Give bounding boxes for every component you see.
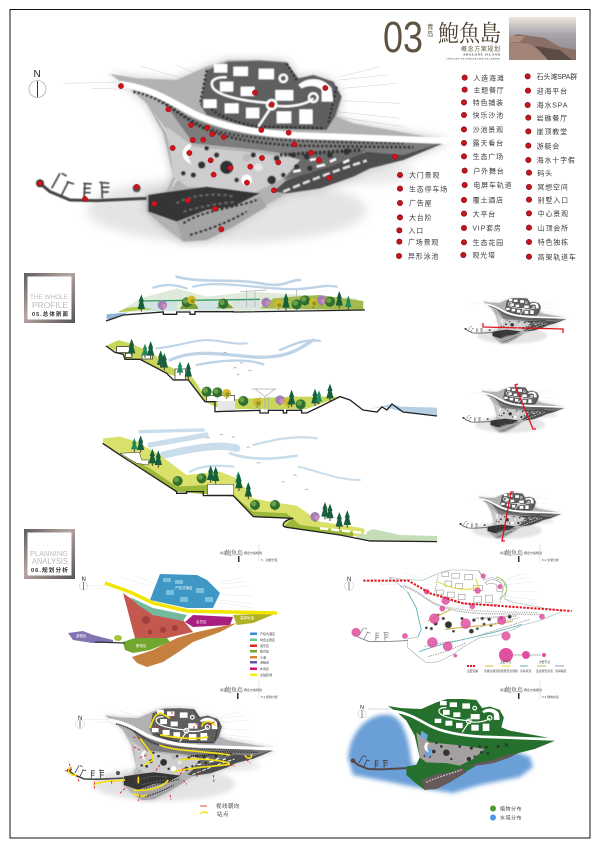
section profile 3 [103,430,437,542]
section heading card: whole profile: THE WHOLE [30,294,68,301]
birds [223,352,251,375]
mini title: zoning: 青岛 [220,550,226,555]
legend column 2: 沙池景观 [473,125,504,134]
legend column 2: 生态花园 [473,238,504,247]
vegetation [119,291,363,312]
legend column 3 [537,72,578,261]
legend column 3: 山顶会所 [538,223,569,232]
sky clouds [153,277,337,289]
north arrow: zoning: N [82,577,86,583]
node circles [352,574,545,657]
zoning map [68,574,277,667]
legend column 2: 电屏车轨道 [473,181,512,190]
mini title: circulation [500,544,559,562]
circulation legend [467,648,566,673]
zone labels: 教育区 [136,643,147,648]
section cut line 1 [483,323,563,333]
legend column 1: 异形泳池 [408,252,439,261]
english title: ABALONE ISLAND [463,52,501,56]
legend column 2: 户外舞台 [473,166,505,175]
ground section line [103,443,437,542]
zoning legend: 特色主题区 [260,637,275,642]
road [393,711,558,740]
legend column 2 [472,73,512,260]
mini title: circulation: 青岛 [500,550,506,555]
legend column 3: 岩礁餐厅 [537,113,568,122]
section cut line 2 [515,384,536,429]
key plan thumbnail 1 [464,298,568,344]
buildings [117,347,235,402]
ground section line [106,346,437,416]
node label: 站点 [217,810,229,818]
mini title: circulation: 5.2 交通分析 [542,557,559,562]
numbered red markers on map [37,83,398,232]
viewing tower [252,389,277,412]
mini title: vegetation and water: 5.4 绿地水系 [542,694,559,699]
zone: magenta [185,615,233,627]
english title [446,52,501,60]
section heading card: whole profile: PROFILE [32,300,68,310]
pier [353,761,406,769]
line labels: 主要道路 [467,669,478,673]
zoning legend [250,631,275,677]
circulation map [352,570,572,663]
section heading card: whole profile: 05.总体剖面 [32,310,68,318]
marina head [351,758,355,763]
zoning legend: 产权式酒店 [260,631,275,636]
city label: 青 [427,22,434,31]
legend column 3: 海水SPA [537,101,568,110]
birds [207,434,308,490]
pier [95,642,125,643]
villa blocks [163,578,213,602]
north arrow: view analysis [76,716,84,728]
zone: purple marina [68,631,113,643]
legend column 3: 崖顶教堂 [537,127,568,136]
south-east shoreline [463,753,518,767]
zone: olive tip [233,613,277,625]
vegetation legend [490,806,522,822]
yellow view corridors [69,713,251,796]
buildings [120,452,234,495]
north arrow: zoning [80,577,88,590]
pebble texture [426,770,461,782]
legend column 2: 特色铺装 [473,98,504,107]
north arrow: vegetation [358,705,390,718]
north arrow: vegetation: N [360,705,364,711]
zone: red central [123,593,193,638]
line labels: 滨海步道 [520,669,531,673]
legend column 2: VIP套房 [472,224,502,233]
section cut line 3 [502,492,514,541]
zone labels [76,585,254,648]
section heading card: planning analysis: 06.规划分析 [31,566,68,574]
legend column 1: 生态停车场 [409,184,448,193]
legend column 2: 大平台 [473,209,496,218]
zoning legend: 休闲区 [260,666,269,671]
arrow label: 视线朝向 [216,802,240,810]
city label [427,22,434,38]
zoning legend: 教育区 [260,648,269,654]
sky clouds [140,430,360,480]
mini title: zoning [220,544,278,562]
view analysis legend [200,802,240,818]
legend column 2: 人造海滩 [473,73,505,82]
legend column 3: 特色独栋 [538,238,569,247]
legend column 3: 石头滩SPA群 [537,72,578,81]
villa rings [439,706,492,732]
inner blue pools [421,731,433,757]
mini title: view analysis: 青岛 [220,687,226,692]
base plan [67,708,277,801]
calligraphy title: 鮑魚島 [438,15,501,48]
line labels: 滨海路径 [555,669,566,673]
photo: coastal rocks [509,17,576,60]
line labels: 次要节点 [539,660,550,664]
red zone tree marks [142,616,178,634]
legend column 1 [408,171,448,261]
hillside planting [103,437,368,537]
zone labels: 游艇区 [76,633,87,638]
pale hill [355,529,437,541]
section heading card: planning analysis: PLANNING [30,549,68,558]
zone labels: 会员区 [196,619,207,624]
key plan thumbnail 2 [462,387,566,433]
zoning legend: 游艇会 [260,660,269,664]
section heading card: planning analysis: ANALYSIS [32,557,68,566]
mini title: vegetation and water: 概念方案规划 [524,687,542,692]
yellow sample [200,812,208,814]
mini title: view analysis [220,681,278,699]
line labels: 次级交通流线 [484,669,501,673]
section profile 2 [106,339,437,416]
legend column 2: 主题餐厅 [473,85,505,94]
white highlight [424,742,429,752]
legend column 1: 入口 [408,227,424,235]
mini title: circulation: 鮑魚島 [505,548,523,557]
legend markers [396,74,532,259]
marina [359,756,388,768]
main master plan map [36,60,450,243]
hillside planting [106,340,340,409]
legend column 2: 露天看台 [473,139,504,148]
mini title: view analysis: 概念方案规划 [244,687,262,692]
red main traffic line [363,581,572,611]
zone: teal strip [130,597,187,621]
mini title: zoning: 概念方案规划 [244,550,262,555]
sky clouds [157,340,320,365]
mini title: zoning: 鮑魚島 [225,548,243,557]
line labels: 别墅区交通线 [501,669,518,673]
legend column 3: 迎海平台 [537,86,568,95]
node scale [499,648,546,662]
map legend list [396,72,578,261]
white structure [217,401,235,410]
line labels: 主要节点 [500,660,511,664]
section profile 1 [106,277,365,321]
zone: green [123,638,170,653]
north arrow: view analysis: N [78,716,82,722]
red view arrows [64,712,251,801]
legend column 2: 覆土酒店 [473,196,504,205]
zone: blue villas [150,574,220,608]
north arrow: main map [29,69,46,98]
section heading card: planning analysis [24,529,75,579]
legend column 1: 大门景观 [409,171,440,180]
legend column 3: 游艇会 [537,141,560,150]
gray centre [416,732,485,766]
line labels: 生态观光步道 [536,669,553,673]
brown promenade [421,767,466,790]
green structures [140,290,297,311]
trees [128,339,334,410]
line samples [467,665,564,667]
distant hill [120,288,365,312]
mini title: circulation: 概念方案规划 [524,550,542,555]
zoning legend: 主轴区域 [260,672,272,677]
legend column 2: 生态广场 [473,152,504,161]
vegetation and water map [348,699,558,793]
legend column 2: 观光塔 [472,251,496,260]
legend: plants: 植物分布 [500,806,522,812]
legend column 3: 海水十字假 [537,156,576,165]
mini title: zoning: 5．功能分区 [261,557,278,562]
mini title: vegetation and water: 青岛 [500,687,506,692]
legend column 1: 广场景观 [408,237,439,246]
legend column 3: 冥想空间 [537,183,569,192]
legend: water: 水域分布 [500,814,522,822]
north arrow: circulation [344,577,354,590]
small green islet [114,635,122,641]
mini title: view analysis: 鮑魚島 [225,685,243,694]
trees [131,435,351,529]
outline base [353,570,562,663]
legend column 3: 码头 [537,168,553,177]
road band [105,583,277,613]
city label: 岛 [427,29,434,38]
arrow sample [200,805,207,807]
zone labels: 产权式酒店 [175,585,193,590]
zone labels: 高架轨道 [240,615,254,620]
zone: orange [132,623,237,667]
title block [383,13,576,62]
white path [320,528,367,533]
north arrow: main map: N [34,69,41,80]
mini title: vegetation and water [500,681,559,699]
line labels [467,660,566,673]
water body [348,715,533,793]
legend column 1: 大台阶 [409,213,432,222]
north arrow: circulation: N [347,577,351,583]
view analysis map [64,708,277,801]
subtitle: 概念方案规划 [461,45,500,53]
legend column 3: 中心景观 [538,209,569,218]
node connector [513,654,541,656]
zoning legend: 游乐区 [260,643,269,648]
section heading card: whole profile [24,273,75,323]
water [363,404,437,416]
english title: CONCEPT OF INTEGRATED PLANNING [446,58,500,60]
legend column 2: 快乐沙池 [473,111,504,120]
title number 03: 03 [383,13,423,62]
legend column 1: 广告屋 [409,199,432,208]
key plan thumbnail 3 [459,493,563,539]
mini title: view analysis: 5.3 视线分析 [261,694,278,699]
buildings [435,701,500,731]
legend column 3: 高架轨道车 [538,252,577,261]
green land [388,699,558,790]
centre tree clusters [424,742,508,761]
ground section line [106,310,365,321]
water [107,312,128,320]
zoning legend: 沙滩 [260,654,266,660]
mini title: vegetation and water: 鮑魚島 [505,685,523,694]
legend column 3: 别墅入口 [538,195,569,204]
base contour [81,577,253,608]
